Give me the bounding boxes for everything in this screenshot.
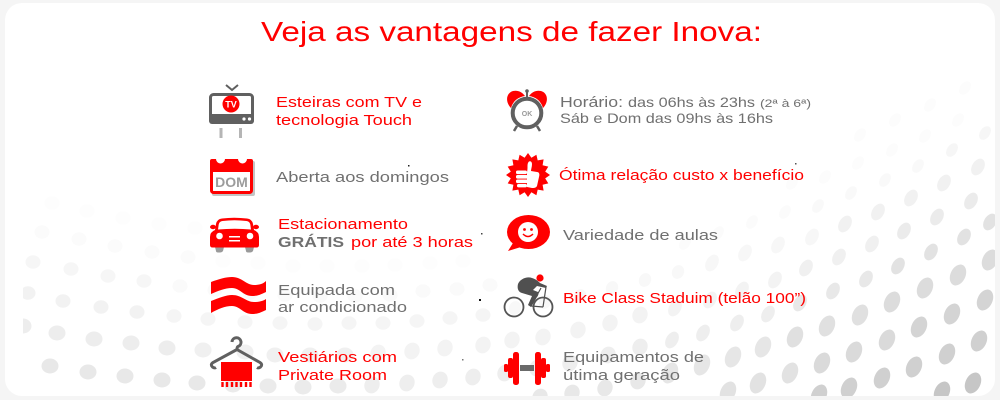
text: horario: Horário:: [560, 94, 623, 111]
text: estacionamento: por até 3 horas: [351, 234, 473, 251]
text: aberta: Aberta aos domingos: [276, 169, 449, 186]
text: horario: (2ª à 6ª): [760, 98, 811, 110]
text: equipada: [278, 282, 407, 316]
text: bike class: Bike Class Staduim (telão 100”): [563, 290, 806, 307]
icon: alarm clock: [507, 89, 547, 131]
icon: smiley speech bubble: [507, 215, 550, 251]
text: esteiras: tecnologia Touch: [276, 112, 412, 129]
icon: TV: TV: [225, 100, 237, 110]
icon: TV: [209, 85, 254, 138]
text: estacionamento: [278, 216, 473, 251]
icon: hanger with towel: [211, 338, 262, 387]
text: otima relacao: Ótima relação custo x benefício: [559, 167, 804, 184]
icon: calendar DOM: DOM: [215, 174, 248, 190]
text: horario: Sáb e Dom das 09hs às 16hs: [560, 110, 773, 126]
text: variedade: Variedade de aulas: [563, 227, 718, 244]
icon: dumbbell: [504, 352, 550, 385]
icon: air conditioning waves: [211, 277, 266, 314]
icon: cyclist: [504, 274, 552, 316]
text: esteiras: [276, 94, 422, 129]
text: vestiarios: Private Room: [278, 367, 387, 384]
text: equipada: ar condicionado: [278, 299, 407, 316]
icon: thumbs up seal: [506, 153, 550, 197]
text: equipamentos: útima geração: [563, 367, 680, 384]
text: equipamentos: [563, 349, 704, 384]
background: halftone dots: [14, 79, 1000, 400]
text: equipada: Equipada com: [278, 282, 395, 299]
text: horario: das 06hs às 23hs: [628, 94, 755, 110]
text: estacionamento: GRÁTIS: [278, 234, 344, 251]
icon: car: [210, 218, 259, 252]
text: esteiras: Esteiras com TV e: [276, 94, 422, 111]
text: estacionamento: Estacionamento: [278, 216, 408, 233]
text: equipamentos: Equipamentos de: [563, 349, 704, 366]
title: Veja as vantagens de fazer Inova:: [261, 16, 762, 47]
icon: calendar DOM: [210, 159, 255, 196]
text: vestiarios: Vestiários com: [278, 349, 397, 366]
icon: alarm clock: OK: [522, 111, 532, 118]
text: horario: [560, 94, 811, 126]
text: vestiarios: [278, 349, 397, 384]
